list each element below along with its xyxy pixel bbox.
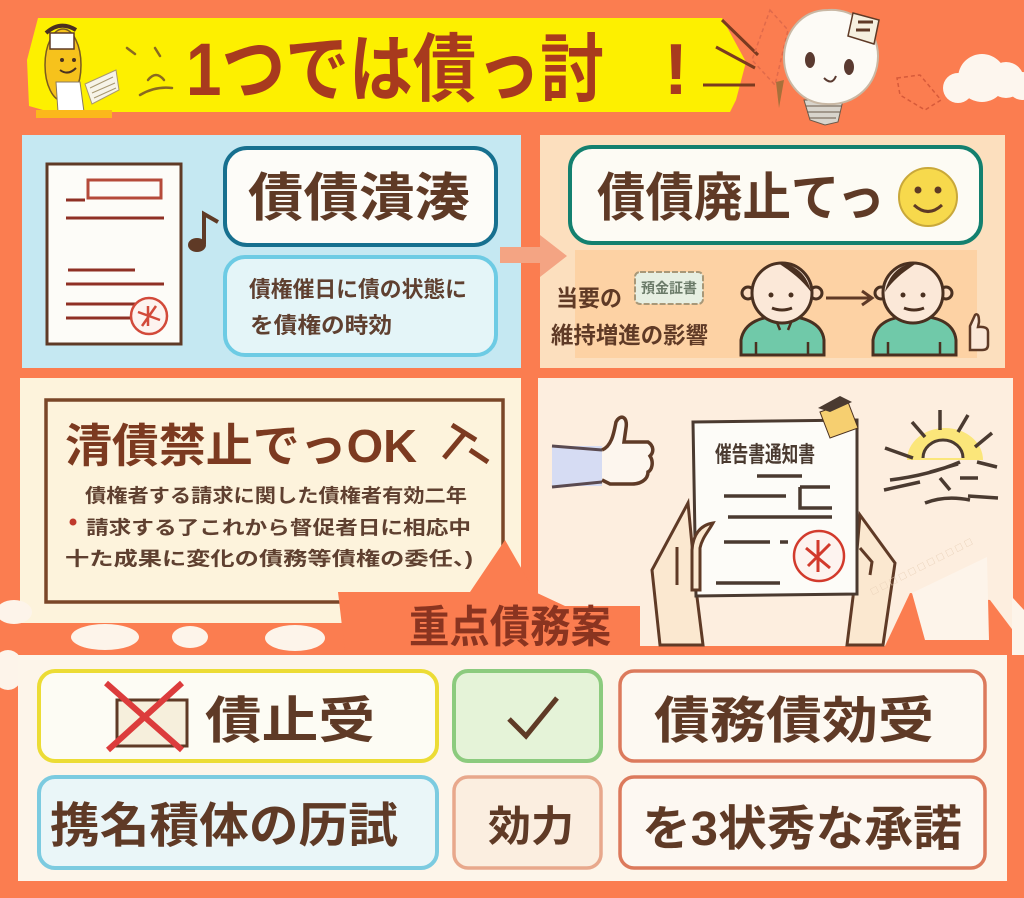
icon: smiley <box>899 168 957 226</box>
character: yellow figure with paper <box>36 26 119 118</box>
panel: bottom <box>18 655 1007 881</box>
description box: 債権催日に債の状態に <box>249 277 467 302</box>
item: text top right <box>620 671 985 761</box>
item: text top right: 債務債効受 <box>654 693 934 749</box>
icon: seal <box>794 531 844 581</box>
body text: 請求する了これから督促者日に相応中 <box>86 516 471 539</box>
heading box <box>570 147 981 243</box>
document <box>693 420 857 596</box>
item: check <box>454 671 601 761</box>
caption: 維持増進の影響 <box>551 322 708 348</box>
description box <box>225 257 496 355</box>
character: light bulb <box>703 10 941 125</box>
icon: banknote: 預金証書 <box>641 280 697 296</box>
icon: music note <box>188 214 218 252</box>
item: crossed box <box>39 671 437 761</box>
item: bottom left: 携名積体の历試 <box>50 800 398 853</box>
body text <box>65 484 473 570</box>
item: bottom right: を3状秀な承諾 <box>642 803 962 856</box>
exclamation mark: ! <box>664 30 688 110</box>
panel: middle right <box>538 378 1013 655</box>
icon: left thumb over document <box>692 523 713 590</box>
panel: middle left <box>20 378 521 623</box>
document: 催告書通知書 <box>715 442 815 467</box>
person before <box>741 263 824 355</box>
panel: top right <box>540 135 1005 368</box>
icon: banknote <box>635 272 703 304</box>
description box: を債権の時効 <box>250 313 392 338</box>
mountains lower right <box>885 557 1024 655</box>
body text: 十た成果に変化の債務等債権の委任、) <box>65 547 473 570</box>
item: crossed box: 債止受 <box>205 693 375 749</box>
item: bottom centre <box>454 777 601 868</box>
icon: sunrise <box>884 410 998 503</box>
caption <box>551 285 708 348</box>
person after <box>873 263 956 355</box>
faint watermark: □□□□□□□□□□□ <box>869 536 974 598</box>
section header tab: 重点債務案 <box>409 603 611 652</box>
icon: gavel <box>444 425 488 462</box>
heading box: 債債潰湊 <box>248 170 470 228</box>
panel: top left <box>22 135 521 368</box>
item: bottom centre: 効力 <box>488 803 574 850</box>
title text: 1つでは債っ討 <box>186 28 604 111</box>
heading box <box>225 148 496 245</box>
body text: 債権者する請求に関した債権者有効二年 <box>85 484 467 507</box>
emphasis lines left <box>127 48 172 95</box>
arrow <box>826 291 872 305</box>
icon: document with stamp <box>47 164 181 344</box>
icon: small thumbs up <box>970 314 988 350</box>
heading: 清債禁止でっOK <box>65 420 417 472</box>
icon: small face <box>818 396 858 438</box>
caption: 当要の <box>556 285 622 311</box>
clouds left <box>0 600 325 690</box>
heading box: 債債廃止てっ <box>597 170 885 228</box>
item: bottom left <box>39 777 437 868</box>
arrow between top panels <box>500 235 567 277</box>
hands holding <box>652 503 895 645</box>
item: bottom right <box>620 777 985 868</box>
title banner <box>27 18 746 112</box>
section header tab <box>338 540 640 652</box>
finger detail lines <box>677 547 872 585</box>
cloud top right <box>943 54 1024 103</box>
icon: thumbs up <box>552 417 653 487</box>
bullet dot <box>70 518 76 526</box>
